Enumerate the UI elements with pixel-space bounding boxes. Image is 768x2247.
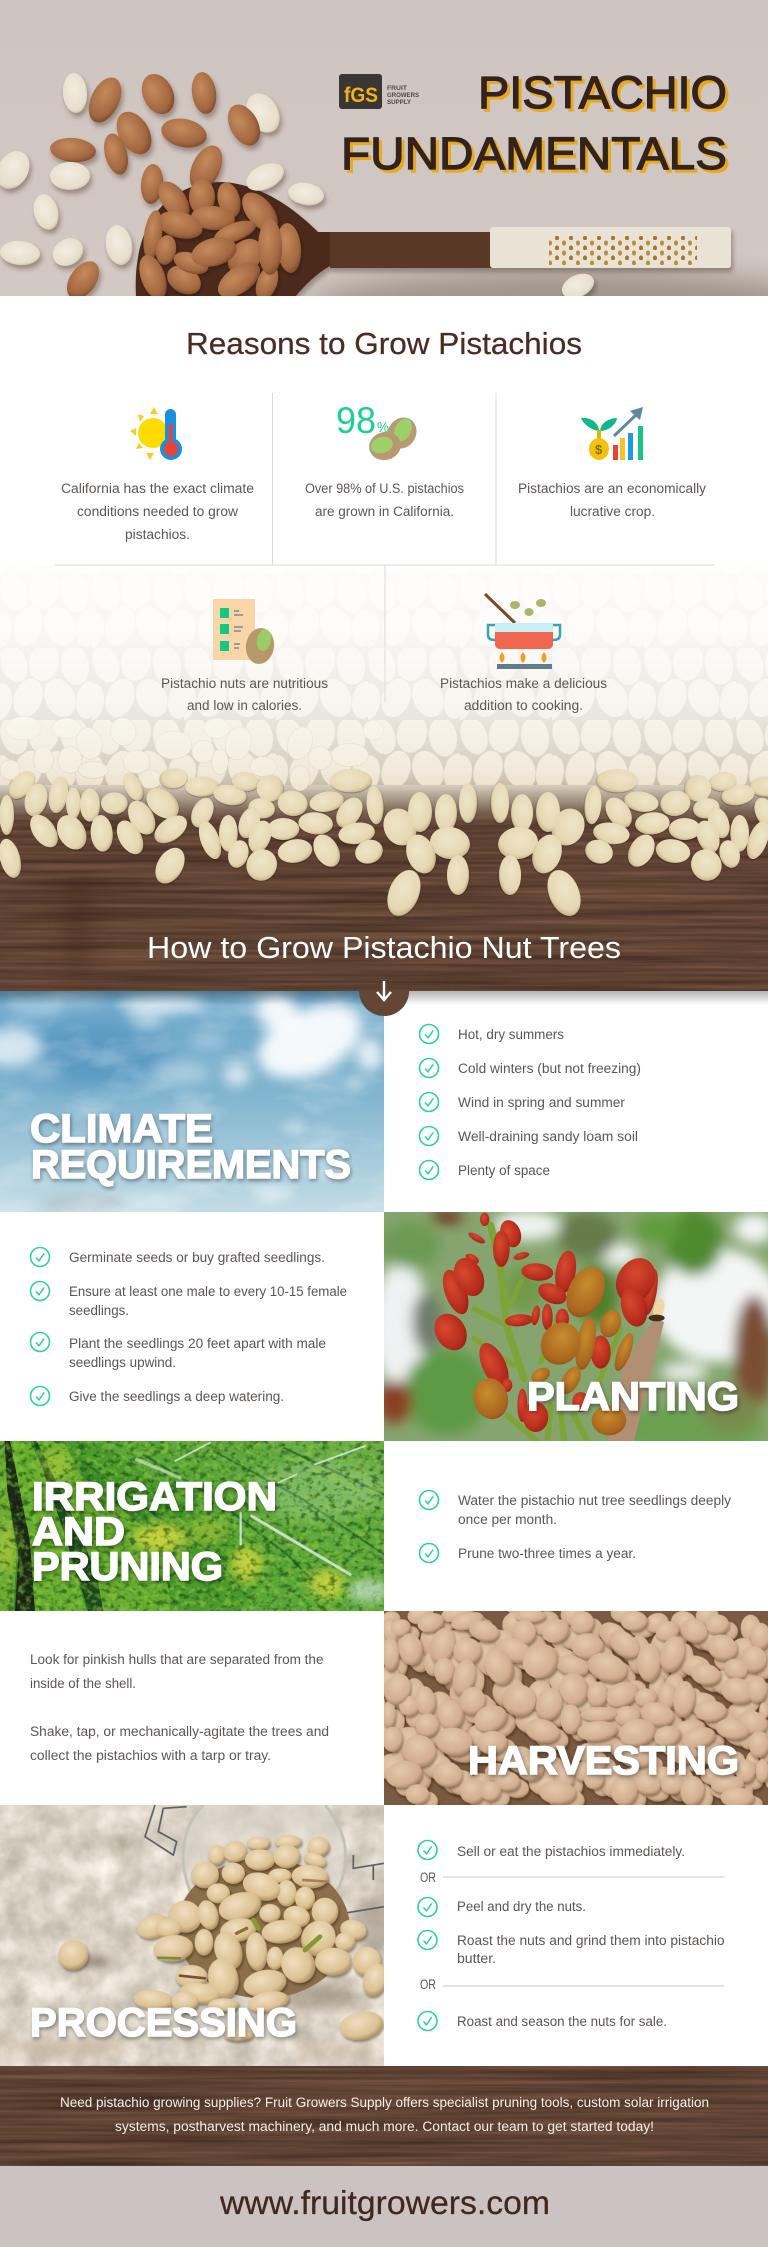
- panel: irrigation checklist: Water the pistachio nut tree seedlings deeply: [458, 1493, 731, 1508]
- logo: [339, 74, 419, 109]
- icon: 98 percent pistachio: 98: [336, 400, 376, 441]
- reason: california climate: conditions needed to grow: [77, 504, 238, 519]
- reason: nutritious: [161, 599, 328, 713]
- reason: nutritious: Pistachio nuts are nutritious: [161, 676, 328, 691]
- header banner: [0, 0, 768, 296]
- panel: processing checklist: Peel and dry the nuts.: [457, 1899, 586, 1914]
- icon: sun and thermometer: [130, 407, 182, 460]
- footer call to action: [0, 2066, 768, 2166]
- reason: lucrative crop: [518, 407, 706, 519]
- logo: FRUIT: [387, 85, 408, 92]
- panel: irrigation image: [0, 1441, 388, 1611]
- reason: cooking: addition to cooking.: [464, 698, 583, 713]
- panel: harvesting text: collect the pistachios with a tarp or tray.: [30, 1748, 271, 1763]
- panel: processing checklist: Roast and season the nuts for sale.: [457, 2014, 667, 2029]
- panel: planting checklist: Germinate seeds or buy grafted seedlings.: [69, 1250, 325, 1265]
- panel: climate checklist: [420, 1024, 641, 1180]
- panel: climate checklist: Hot, dry summers: [458, 1027, 564, 1042]
- reason: 98 percent: are grown in California.: [315, 504, 454, 519]
- logo: GROWERS: [387, 92, 419, 99]
- blurred garden background: [372, 1209, 768, 1450]
- reason: 98 percent: [305, 400, 464, 519]
- reason: california climate: pistachios.: [125, 527, 190, 542]
- branch: [607, 1319, 664, 1441]
- panel: planting checklist: seedlings.: [69, 1303, 129, 1318]
- panel: processing checklist: OR: [420, 1977, 436, 1992]
- panel: climate checklist: Cold winters (but not freezing): [458, 1061, 641, 1076]
- panel: harvesting text: inside of the shell.: [30, 1676, 136, 1691]
- logo: fGS: [344, 84, 378, 107]
- photo: wooden spoon: [136, 182, 731, 296]
- panel: irrigation checklist: Prune two-three times a year.: [458, 1546, 636, 1561]
- dividers: [55, 393, 715, 702]
- reason: cooking: [440, 594, 607, 713]
- title: [344, 75, 728, 174]
- logo: SUPPLY: [387, 99, 411, 106]
- panel: harvesting text: [30, 1652, 329, 1763]
- irrigation label: AND: [32, 1510, 125, 1554]
- photo: almonds in spoon: [139, 180, 303, 296]
- panel: climate image: [0, 989, 384, 1212]
- reason: california climate: California has the exact climate: [61, 481, 254, 496]
- icon: checklist with pistachio: [213, 599, 276, 666]
- footer website: www.fruitgrowers.com: [219, 2184, 550, 2221]
- panel: climate checklist: Plenty of space: [458, 1163, 550, 1178]
- panel: processing checklist: Roast the nuts and grind them into pistachio: [457, 1933, 724, 1948]
- footer website: [0, 2166, 768, 2247]
- panel: planting checklist: Plant the seedlings 20 feet apart with male: [69, 1336, 326, 1351]
- panel: climate checklist: Wind in spring and summer: [458, 1095, 626, 1110]
- photo: scattered nuts: [0, 69, 598, 305]
- irrigation label: PRUNING: [32, 1545, 223, 1589]
- lower nuts mirrored: [491, 766, 768, 921]
- panel: harvesting text: Look for pinkish hulls that are separated from the: [30, 1652, 324, 1667]
- icon: money plant and bars: [581, 407, 643, 460]
- panel: irrigation checklist: [420, 1490, 731, 1562]
- arrow tab: [359, 981, 409, 1016]
- climate label: [30, 1107, 351, 1187]
- icon: 98 percent pistachio: %: [377, 419, 389, 436]
- panel: climate checklist: Well-draining sandy loam soil: [458, 1129, 638, 1144]
- reason: lucrative crop: Pistachios are an economically: [518, 481, 706, 496]
- climate label: CLIMATE: [30, 1107, 213, 1151]
- pile of nuts: [58, 1835, 391, 2043]
- glass jar: [185, 1805, 343, 1888]
- title: PISTACHIO: [478, 67, 727, 118]
- red fruits: [428, 1213, 663, 1432]
- reason: california climate: [61, 407, 254, 542]
- lower nuts: [0, 766, 477, 921]
- panel: processing checklist: butter.: [457, 1951, 496, 1966]
- nut pile and wood background: [0, 565, 768, 1020]
- title: FUNDAMENTALS: [341, 128, 727, 179]
- footer call to action: Need pistachio growing supplies? Fruit Growers Supply offers specialist pruning tools, custom solar irrigation: [60, 2095, 709, 2110]
- gap-filling nuts behind: [384, 1611, 768, 1805]
- planting label: PLANTING: [527, 1375, 739, 1419]
- green stems: [474, 1225, 621, 1441]
- reason: cooking: Pistachios make a delicious: [440, 676, 607, 691]
- crop rows: [0, 1441, 384, 1611]
- panel: harvesting text: Shake, tap, or mechanically-agitate the trees and: [30, 1724, 329, 1739]
- reason: nutritious: and low in calories.: [187, 698, 302, 713]
- heading: reasons to grow: Reasons to Grow Pistachios: [186, 326, 582, 361]
- reason: 98 percent: Over 98% of U.S. pistachios: [305, 481, 464, 496]
- panel: planting checklist: Give the seedlings a deep watering.: [69, 1389, 284, 1404]
- panel: planting checklist: seedlings upwind.: [69, 1355, 176, 1370]
- panel: processing checklist: OR: [420, 1870, 436, 1885]
- panel: processing image: [0, 1805, 397, 2066]
- panel: irrigation checklist: once per month.: [458, 1512, 557, 1527]
- wood dark knot shading: [61, 894, 96, 970]
- heading: how to grow: How to Grow Pistachio Nut Trees: [147, 930, 621, 965]
- wood header shadow: [0, 991, 768, 1005]
- pile of pistachios: [380, 1609, 768, 1808]
- dark shadow inside pile: [177, 1858, 350, 1998]
- climate label: REQUIREMENTS: [31, 1143, 351, 1187]
- harvesting label: HARVESTING: [468, 1739, 739, 1783]
- surface flecks and shadows: [7, 1898, 397, 2060]
- faded upper nuts: [0, 715, 383, 791]
- panel: planting checklist: [30, 1248, 347, 1406]
- icon: money plant and bars: $: [595, 442, 603, 457]
- panel: harvesting image: [384, 1611, 768, 1805]
- panel: planting checklist: Ensure at least one male to every 10-15 female: [69, 1284, 347, 1299]
- panel: planting image: [372, 1209, 768, 1450]
- sprinkler pipes: [137, 1443, 388, 1603]
- reason: lucrative crop: lucrative crop.: [570, 504, 655, 519]
- irrigation label: IRRIGATION: [32, 1475, 277, 1519]
- panel: processing checklist: Sell or eat the pistachios immediately.: [457, 1844, 685, 1859]
- icon: 98 percent pistachio: [336, 400, 422, 464]
- panel: processing checklist: [418, 1840, 724, 2030]
- processing label: PROCESSING: [30, 2001, 297, 2045]
- footer call to action: systems, postharvest machinery, and much more. Contact our team to get started today!: [115, 2119, 654, 2134]
- icon: cooking pot on burner: [485, 594, 560, 669]
- irrigation label: [32, 1475, 277, 1589]
- clouds: [0, 989, 383, 1212]
